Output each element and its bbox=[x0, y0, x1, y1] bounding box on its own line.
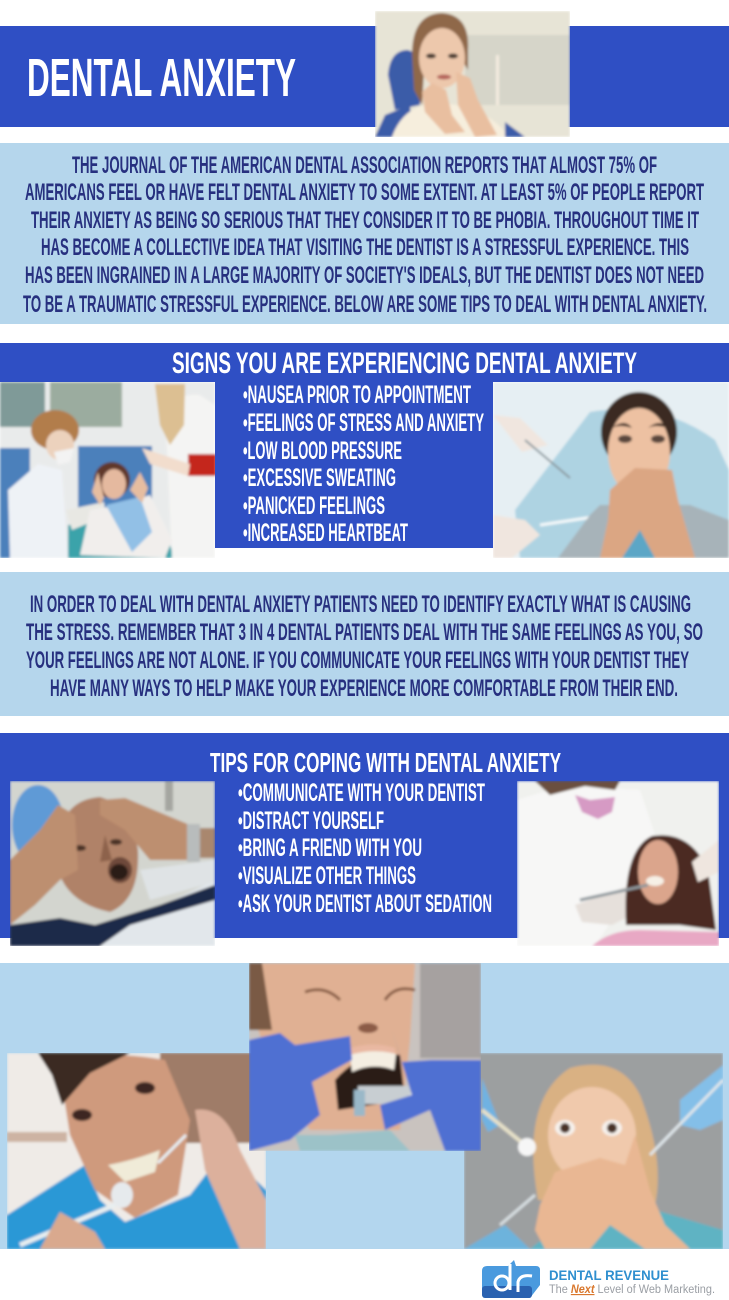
photo: woman with hands over mouth and instruments bbox=[464, 1053, 723, 1249]
bulleted list: signs bbox=[243, 381, 484, 547]
photo: panicked bald man bbox=[10, 781, 215, 946]
panel: introduction bbox=[0, 143, 729, 324]
bulleted list: tips: •COMMUNICATE WITH YOUR DENTIST bbox=[238, 779, 485, 807]
photo: worried woman in dental chair bbox=[375, 11, 570, 137]
text block: introduction bbox=[23, 152, 707, 318]
text block: guidance paragraph bbox=[26, 591, 703, 702]
bulleted list: signs: •LOW BLOOD PRESSURE bbox=[243, 437, 402, 465]
logo name: DENTAL REVENUE bbox=[549, 1267, 669, 1283]
bulleted list: signs: •PANICKED FEELINGS bbox=[243, 492, 385, 520]
photo: dentist treating smiling patient bbox=[517, 781, 719, 946]
logo tagline: The Next Level of Web Marketing. bbox=[549, 1284, 715, 1296]
bulleted list: signs: •INCREASED HEARTBEAT bbox=[243, 519, 408, 547]
photo: man with mirror and probe bbox=[7, 1053, 266, 1249]
bulleted list: tips bbox=[238, 779, 492, 918]
photo: frightened patient with two dentists bbox=[0, 382, 216, 558]
bulleted list: signs: •NAUSEA PRIOR TO APPOINTMENT bbox=[243, 381, 471, 409]
panel: guidance paragraph bbox=[0, 572, 729, 716]
bulleted list: signs: •EXCESSIVE SWEATING bbox=[243, 464, 396, 492]
bulleted list: tips: •DISTRACT YOURSELF bbox=[238, 807, 384, 835]
logo: Dental Revenue bbox=[482, 1260, 715, 1298]
bulleted list: tips: •BRING A FRIEND WITH YOU bbox=[238, 834, 422, 862]
panel: signs band bbox=[0, 343, 729, 548]
photo: patient grimacing during drilling bbox=[249, 963, 481, 1151]
photo: woman covering her mouth bbox=[493, 382, 729, 558]
header band bbox=[0, 26, 729, 127]
logo mark bbox=[482, 1260, 540, 1298]
bulleted list: tips: •ASK YOUR DENTIST ABOUT SEDATION bbox=[238, 890, 492, 918]
bulleted list: signs: •FEELINGS OF STRESS AND ANXIETY bbox=[243, 409, 484, 437]
panel: tips band bbox=[0, 733, 729, 938]
title: DENTAL ANXIETY bbox=[27, 48, 296, 108]
panel: photo collage background bbox=[0, 963, 729, 1249]
bulleted list: tips: •VISUALIZE OTHER THINGS bbox=[238, 862, 416, 890]
